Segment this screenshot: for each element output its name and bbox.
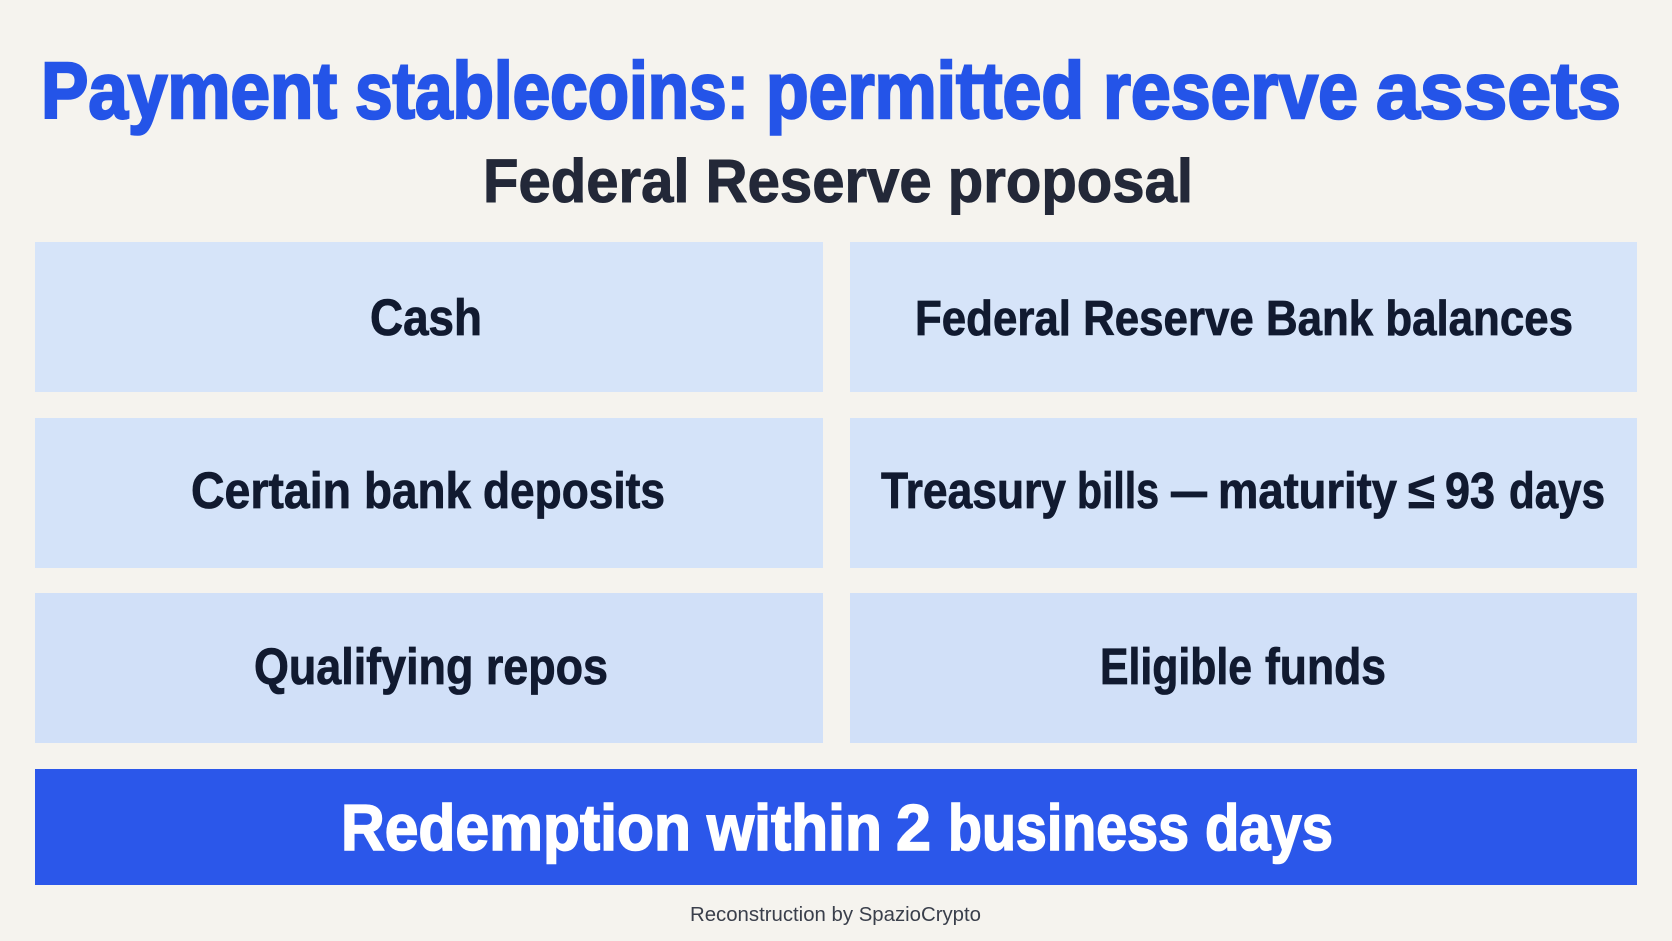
label: federal reserve bank balances: Federal Reserve Bank balances: [915, 292, 1573, 346]
panel: certain bank deposits: [35, 418, 823, 568]
label: eligible funds: funds: [1265, 638, 1386, 695]
label: treasury bills: bills: [1077, 462, 1159, 519]
label: treasury bills: 93: [1445, 462, 1495, 519]
panel: eligible funds: [850, 593, 1637, 743]
label: cash: Cash: [370, 289, 482, 346]
panel: qualifying repos: [35, 593, 823, 743]
subtitle: Federal Reserve proposal: [483, 147, 1193, 215]
title: Payment: [41, 46, 337, 135]
panel: federal reserve bank balances: [850, 242, 1637, 392]
label: treasury bills: Treasury: [881, 462, 1067, 519]
label: treasury bills: maturity: [1218, 462, 1398, 519]
banner: redemption: [35, 769, 1637, 885]
label: certain bank deposits: bank: [364, 462, 472, 519]
banner text: within: [706, 791, 882, 864]
label: treasury bills: days: [1509, 462, 1605, 519]
panel: cash: [35, 242, 823, 392]
banner text: days: [1205, 791, 1333, 864]
title: assets: [1376, 46, 1621, 135]
banner text: business: [948, 791, 1189, 864]
label: treasury bills: ≤: [1408, 462, 1435, 519]
label: certain bank deposits: Certain: [191, 462, 351, 519]
title: permitted: [766, 46, 1084, 135]
label: certain bank deposits: deposits: [483, 462, 665, 519]
label: treasury bills: —: [1171, 462, 1207, 519]
banner text: 2: [896, 791, 931, 864]
title: reserve: [1103, 46, 1358, 135]
label: qualifying repos: Qualifying repos: [254, 638, 608, 695]
footer credit: Reconstruction by SpazioCrypto: [690, 904, 981, 926]
label: eligible funds: Eligible: [1100, 638, 1252, 695]
panel: treasury bills: [850, 418, 1637, 568]
banner text: Redemption: [341, 791, 691, 864]
title: stablecoins:: [355, 46, 749, 135]
